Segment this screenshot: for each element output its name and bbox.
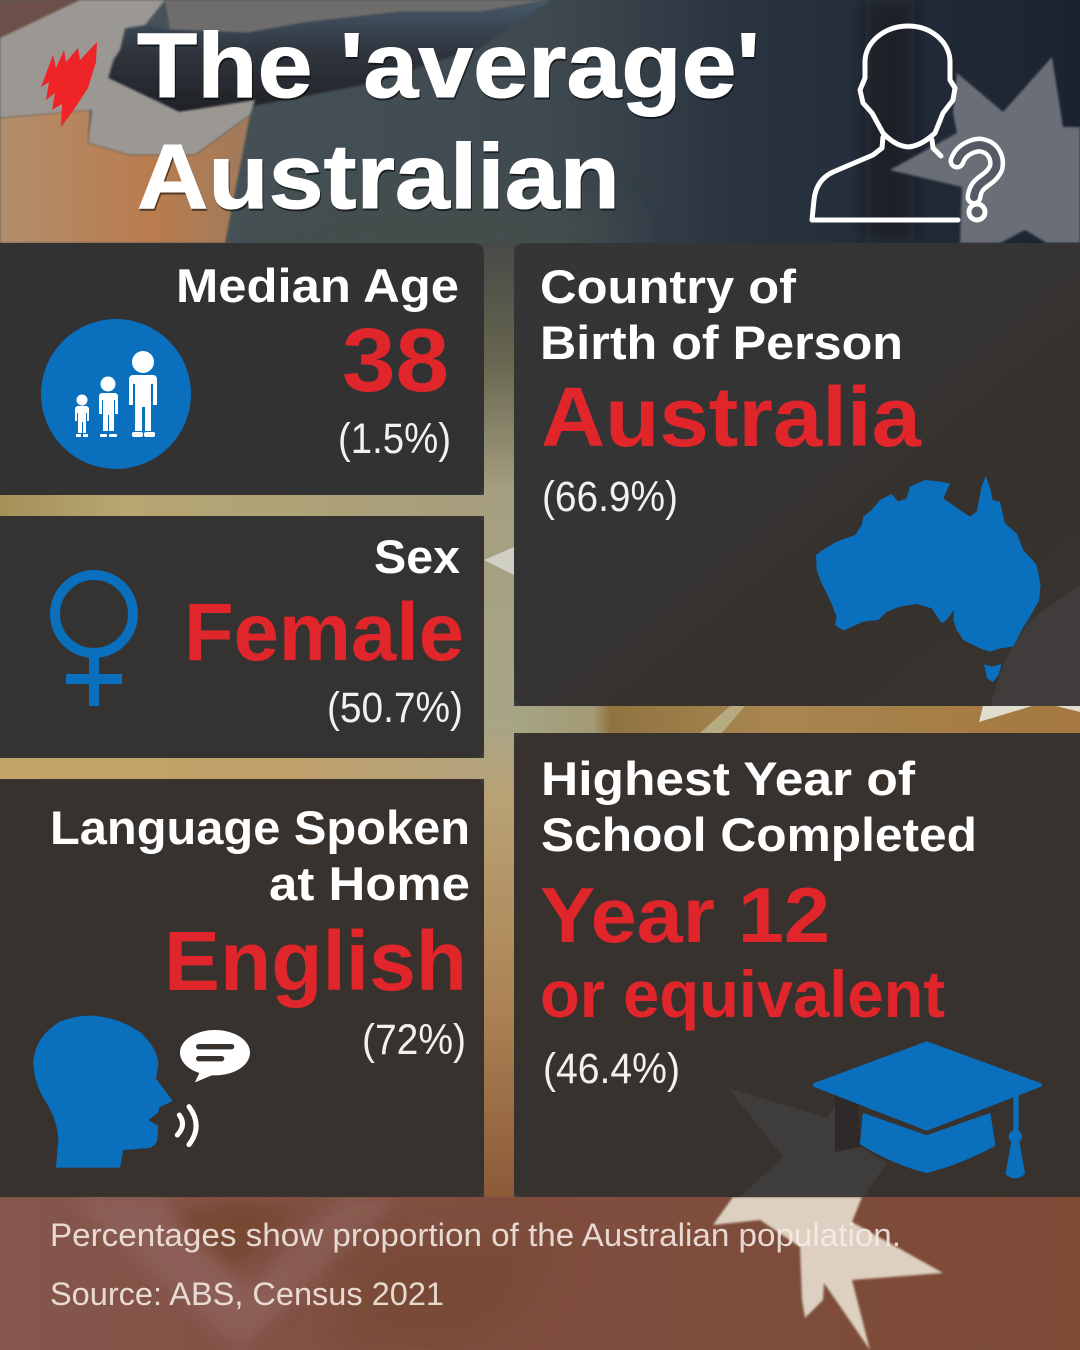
footer note: percentages: Percentages show proportion of the Australian population. <box>50 1217 901 1253</box>
heading: sex: Sex <box>374 530 460 583</box>
icon: graduation cap <box>815 1043 1040 1177</box>
heading: language spoken at home <box>50 801 470 910</box>
icon: SBS logo <box>41 42 97 127</box>
percentage: 72%: (72%) <box>362 1016 466 1064</box>
icon: person silhouette with question mark <box>812 26 997 220</box>
icon: map of australia <box>816 476 1041 682</box>
icon: female symbol <box>55 575 133 706</box>
panel: country of birth <box>514 243 1080 706</box>
percentage: 50.7%: (50.7%) <box>327 684 463 732</box>
percentage: 46.4%: (46.4%) <box>543 1045 680 1093</box>
value: english: English <box>164 914 467 1008</box>
heading: median age: Median Age <box>176 259 459 312</box>
heading: highest year of school completed: Highest Year of <box>541 752 915 805</box>
heading: language spoken at home: Language Spoken <box>50 801 470 854</box>
panel: sex <box>0 516 484 758</box>
heading: language spoken at home: at Home <box>269 857 470 910</box>
title: The 'average' <box>137 15 760 117</box>
value: 38: 38 <box>342 311 449 411</box>
heading: country of birth of person: Birth of Person <box>540 316 903 369</box>
heading: highest year of school completed <box>541 752 977 861</box>
footer note: source: Source: ABS, Census 2021 <box>50 1276 444 1312</box>
heading: country of birth of person <box>540 260 903 369</box>
percentage: 1.5%: (1.5%) <box>338 415 451 463</box>
heading: highest year of school completed: School Completed <box>541 808 977 861</box>
panel: median age <box>0 243 484 495</box>
panel: language spoken at home <box>0 779 484 1197</box>
value: year 12 or equivalent: or equivalent <box>540 957 945 1031</box>
value: female: Female <box>184 587 464 678</box>
icon: family of three growing figures <box>41 319 191 469</box>
title <box>137 15 760 228</box>
title: Australian <box>137 126 620 228</box>
value: year 12 or equivalent <box>540 871 945 1031</box>
heading: country of birth of person: Country of <box>540 260 796 313</box>
value: year 12 or equivalent: Year 12 <box>540 871 830 959</box>
panel: highest year of school <box>514 733 1080 1197</box>
percentage: 66.9%: (66.9%) <box>542 473 678 521</box>
icon: speaking head with bubble <box>33 1016 250 1168</box>
value: australia: Australia <box>541 370 922 464</box>
